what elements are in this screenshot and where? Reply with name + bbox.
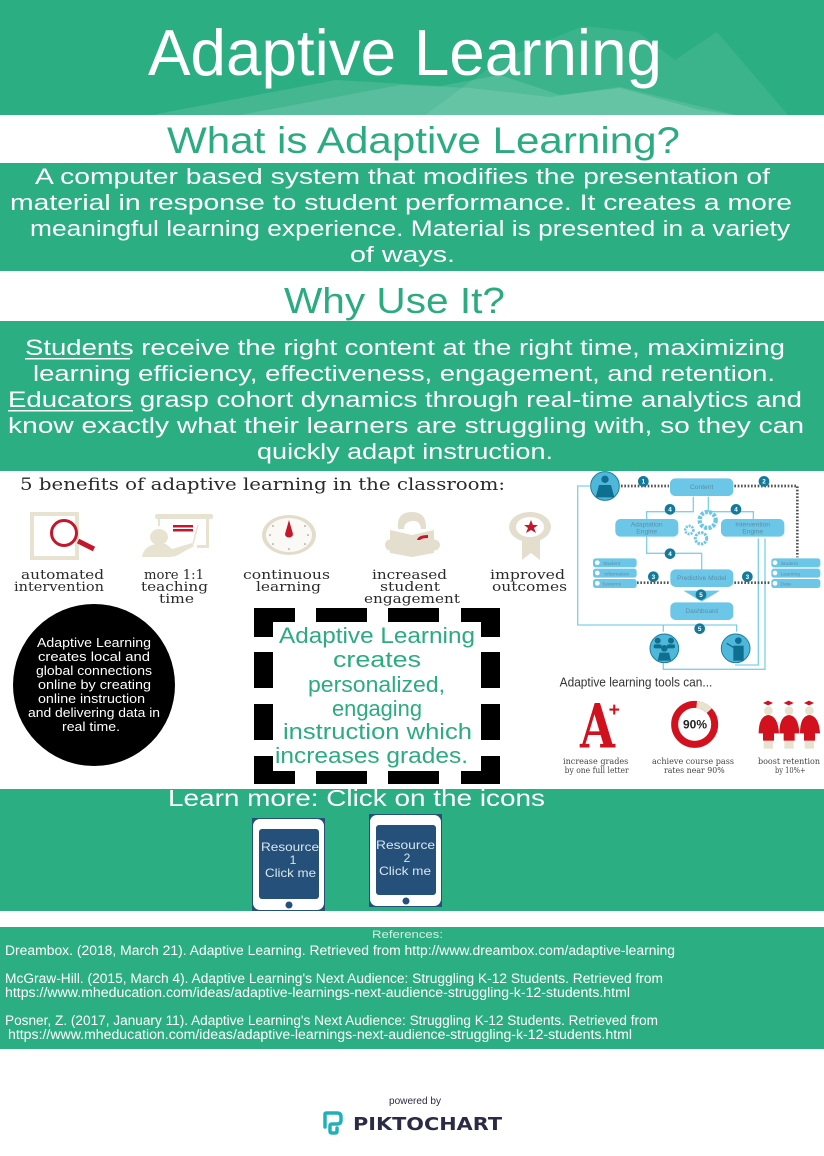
stat: grades [563, 692, 629, 775]
list: student learning data: Data [780, 581, 791, 587]
title: Adaptive Learning [148, 16, 662, 89]
badges: step numbers: 4 [668, 507, 672, 514]
panel: why use it text: know exactly what their learners are struggling with, so they can [8, 413, 804, 438]
box: dashboard: Dashboard [685, 608, 718, 615]
stat: grades: A [579, 692, 616, 763]
callout: dashed frame: increases grades. [275, 743, 468, 768]
stat: retention [758, 701, 820, 775]
benefit: continuous learning: learning [256, 580, 321, 595]
chart: adaptive learning flow diagram [578, 472, 820, 669]
panel: references: https://www.mheducation.com/ideas/adaptive-learnings-next-audience-struggling-k-12-students.html [5, 985, 630, 1000]
panel: references: McGraw-Hill. (2015, March 4). Adaptive Learning's Next Audience: Struggling K-12 Students. Retrieved from [5, 971, 663, 986]
badges: step numbers: 5 [699, 592, 703, 599]
callout: black circle: real time. [62, 719, 120, 734]
callout: black circle: creates local and [38, 649, 150, 664]
stat: grades: + [609, 700, 620, 721]
panel: references: Dreambox. (2018, March 21). Adaptive Learning. Retrieved from http://www.dreambox.com/adaptive-learning [5, 943, 675, 958]
heading: what is adaptive learning: What is Adaptive Learning? [167, 120, 680, 161]
benefit: improved outcomes: improved [490, 568, 565, 583]
benefit: increased student engagement: increased [372, 568, 447, 583]
footer: powered by piktochart [325, 1096, 503, 1135]
badges: step numbers [638, 476, 769, 634]
panel: references: https://www.mheducation.com/ideas/adaptive-learnings-next-audience-struggling-k-12-students.html [8, 1027, 632, 1042]
icon: student circle [591, 472, 619, 500]
icon: resource 1 tablet: Resource [261, 840, 319, 854]
panel: learn more [0, 785, 824, 911]
panel: why use it text: learning efficiency, effectiveness, engagement, and retention. [33, 361, 775, 386]
callout: dashed frame: Adaptive Learning [279, 623, 475, 648]
list: student information systems: Student [603, 561, 621, 567]
callout: dashed frame: personalized, [308, 672, 445, 697]
panel: references: Posner, Z. (2017, January 11). Adaptive Learning's Next Audience: Struggling K-12 Students. Retrieved from [5, 1013, 658, 1028]
badges: step numbers: 3 [746, 574, 750, 581]
panel: adaptive learning tools [560, 676, 820, 775]
callout: dashed frame: creates [333, 647, 421, 672]
icon: student reading [385, 512, 440, 557]
benefit: automated intervention: automated [21, 568, 104, 583]
panel: definition: meaningful learning experience. Material is presented in a variety [30, 216, 790, 241]
stat: pass rates: rates near 90% [664, 766, 725, 775]
heading: learn more: Learn more: Click on the icons [168, 785, 545, 811]
callout: dashed frame [254, 608, 500, 784]
icon: resource 2 tablet: 2 [404, 851, 411, 865]
footer: powered by piktochart: PIKTOCHART [353, 1114, 503, 1135]
icon: resource 1 tablet [252, 818, 325, 911]
heading: why use it: Why Use It? [284, 280, 505, 321]
box: intervention engine: Engine [742, 529, 763, 536]
callout: black circle: online by creating [38, 677, 151, 692]
box: predictive model [670, 569, 733, 587]
badges: step numbers: 1 [642, 479, 646, 486]
panel: why use it text: Educators grasp cohort dynamics through real-time analytics and [8, 387, 802, 412]
heading: tools can: Adaptive learning tools can... [560, 676, 712, 690]
panel: why use it text: quickly adapt instruction. [257, 439, 553, 464]
stat: grades: by one full letter [565, 766, 629, 775]
stat: retention: by 10%+ [775, 766, 806, 775]
panel: definition: material in response to student performance. It creates a more [10, 190, 792, 215]
box: intervention engine: Intervention [735, 521, 770, 528]
callout: black circle: global connections [36, 663, 153, 678]
benefit: automated intervention [14, 514, 105, 595]
box: adaptation engine: Engine [636, 529, 657, 536]
icon: gears [685, 512, 716, 544]
panel: definition: A computer based system that modifies the presentation of [35, 164, 771, 189]
benefit: more teaching time: more 1:1 [144, 568, 204, 583]
benefit: automated intervention: intervention [14, 580, 105, 595]
box: dashboard [670, 602, 733, 620]
badges: step numbers: 4 [734, 507, 738, 514]
icon: award ribbon [509, 512, 551, 560]
icon: resource 2 tablet: Click me [379, 864, 431, 878]
panel: why use it text [0, 321, 824, 471]
benefit: increased student engagement: engagement [364, 592, 461, 607]
callout: black circle [13, 604, 175, 766]
box: intervention engine [721, 519, 784, 537]
icon: teacher at board [142, 514, 213, 557]
list: student information systems: Systems [602, 581, 622, 587]
benefit: more teaching time: time [159, 592, 194, 607]
stat: pass rates [652, 704, 734, 775]
icon: educator [721, 634, 750, 663]
benefit: improved outcomes: outcomes [492, 580, 567, 595]
list: student learning data: Learning [781, 571, 800, 577]
benefit: increased student engagement: student [380, 580, 441, 595]
icon: clock [262, 515, 316, 555]
list: student learning data [771, 558, 820, 588]
callout: black circle: and delivering data in [28, 705, 160, 720]
benefit: more teaching time: teaching [141, 580, 208, 595]
icon: resource 2 tablet [369, 814, 442, 907]
benefit: improved outcomes [490, 512, 567, 595]
icon: resource 1 tablet: 1 [290, 853, 297, 867]
icon: resource 1 tablet: Click me [265, 866, 316, 880]
box: adaptation engine [615, 519, 678, 537]
stat: pass rates: achieve course pass [652, 757, 734, 766]
stat: retention: boost retention [758, 757, 820, 766]
box: content [670, 478, 733, 496]
box: content: Content [690, 484, 713, 491]
panel: definition [0, 163, 824, 271]
panel: definition: of ways. [350, 242, 455, 267]
badges: step numbers: 4 [668, 551, 672, 558]
footer: powered by piktochart: powered by [389, 1096, 441, 1107]
icon: piktochart logo [325, 1113, 341, 1133]
icon: magnifier on screen [32, 514, 94, 558]
stat: grades: increase grades [563, 757, 628, 766]
badges: step numbers: 5 [698, 626, 702, 633]
panel: references [0, 927, 824, 1049]
icon: resource 2 tablet: Resource [376, 838, 435, 852]
callout: black circle: Adaptive Learning [37, 635, 151, 650]
callout: dashed frame: instruction which [283, 719, 472, 744]
box: predictive model: Predictive Model [677, 575, 727, 582]
panel: why use it text: Students receive the right content at the right time, maximizing [25, 335, 785, 360]
list: student information systems [593, 558, 637, 588]
callout: black circle: online instruction [38, 691, 145, 706]
box: adaptation engine: Adaptation [631, 521, 663, 528]
callout: dashed frame: engaging [332, 696, 422, 721]
icon: learners group [650, 634, 679, 663]
arrows: chevron flows [621, 486, 797, 583]
benefit: continuous learning [243, 515, 330, 595]
benefit: continuous learning: continuous [243, 568, 330, 583]
stat: pass rates: 90% [683, 718, 707, 732]
badges: step numbers: 3 [652, 574, 656, 581]
panel: references: References: [372, 929, 443, 941]
badges: step numbers: 2 [762, 479, 766, 486]
list: student learning data: Student [781, 561, 799, 567]
header banner [0, 0, 824, 115]
heading: 5 benefits: 5 benefits of adaptive learning in the classroom: [20, 475, 505, 495]
benefit: increased student engagement [364, 512, 461, 607]
benefit: more teaching time [141, 514, 213, 607]
list: student information systems: Information [604, 571, 629, 577]
